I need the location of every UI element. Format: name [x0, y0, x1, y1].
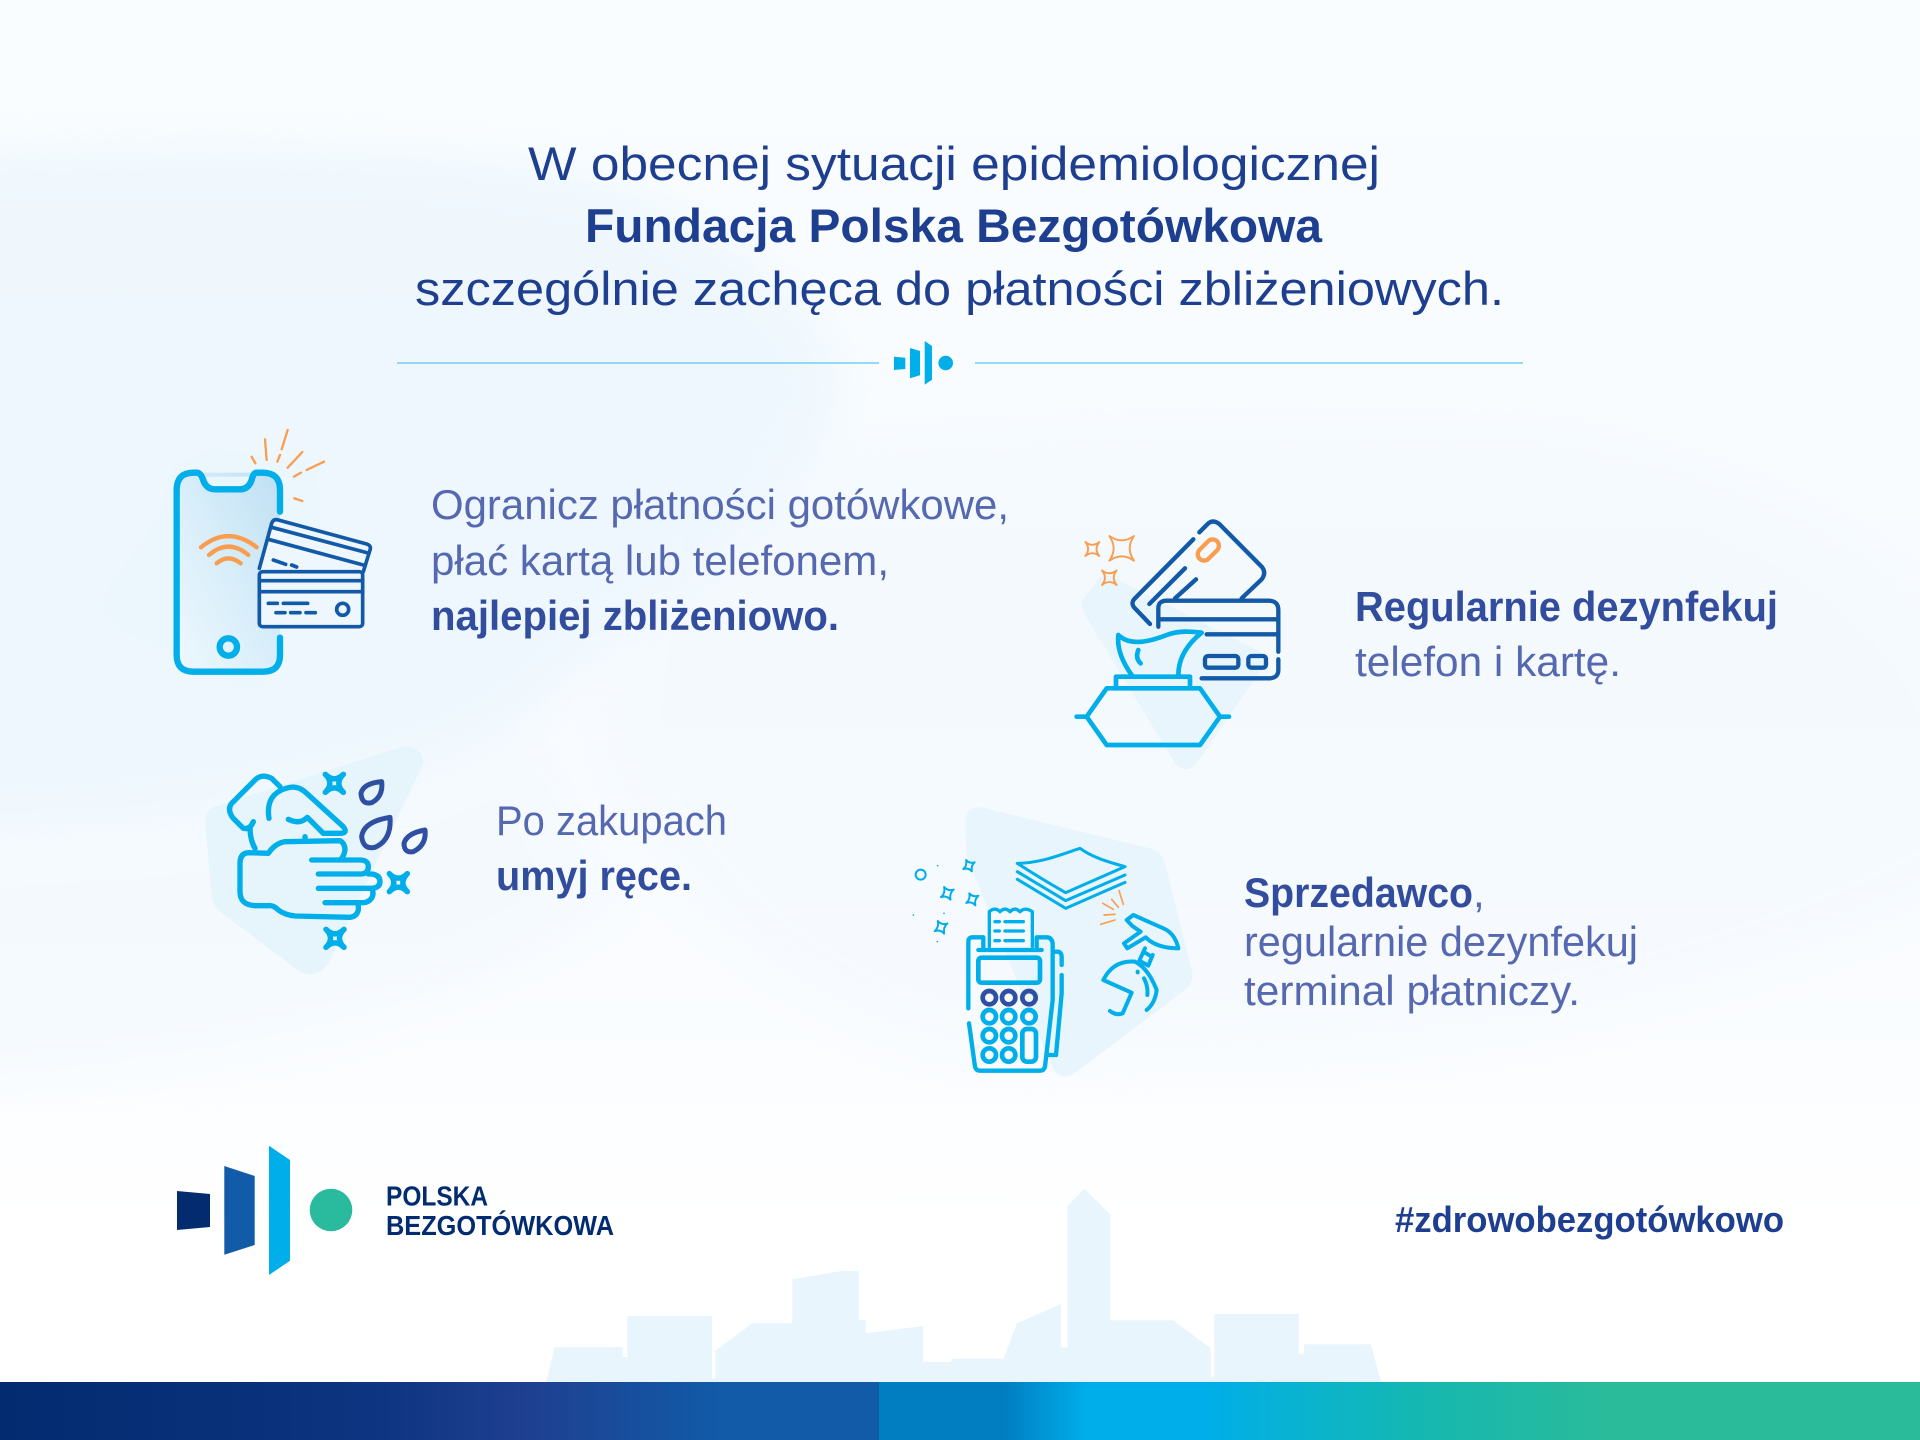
- title: Fundacja Polska Bezgotówkowa: [585, 199, 1323, 252]
- text: disinfect phone and card: telefon i kartę.: [1355, 638, 1621, 685]
- hashtag: #zdrowobezgotówkowo: [1395, 1199, 1784, 1240]
- text: seller disinfect terminal: Sprzedawco,: [1244, 869, 1485, 916]
- text: wash hands: [496, 797, 727, 899]
- text: seller disinfect terminal: regularnie dezynfekuj: [1244, 918, 1638, 965]
- icon: phone with cards: [103, 430, 370, 690]
- text: wash hands: Po zakupach: [496, 797, 727, 844]
- city skyline: [546, 1189, 1381, 1382]
- text: disinfect phone and card: Regularnie dezynfekuj: [1355, 583, 1778, 630]
- divider with logo mark: [397, 341, 1523, 385]
- icon: wipes and cards: [1077, 521, 1278, 769]
- text: seller disinfect terminal: [1244, 869, 1638, 1014]
- title: [415, 137, 1504, 315]
- title: W obecnej sytuacji epidemiologicznej: [528, 137, 1380, 190]
- text: disinfect phone and card: [1355, 583, 1778, 685]
- bottom gradient bar: [0, 1382, 1920, 1440]
- text: limit cash payments: najlepiej zbliżeniowo.: [431, 592, 839, 639]
- text: limit cash payments: Ogranicz płatności gotówkowe,: [431, 481, 1009, 528]
- text: limit cash payments: [431, 481, 1009, 639]
- title: szczególnie zachęca do płatności zbliżeniowych.: [415, 262, 1504, 315]
- logo: Polska Bezgotówkowa: [177, 1146, 614, 1275]
- logo: Polska Bezgotówkowa: BEZGOTÓWKOWA: [386, 1210, 614, 1241]
- text: seller disinfect terminal: terminal płatniczy.: [1244, 967, 1580, 1014]
- text: limit cash payments: płać kartą lub telefonem,: [431, 537, 889, 584]
- icon: payment terminal and spray: [912, 807, 1192, 1076]
- text: wash hands: umyj ręce.: [496, 852, 692, 899]
- icon: washing hands: [205, 747, 425, 974]
- logo: Polska Bezgotówkowa: POLSKA: [386, 1180, 488, 1212]
